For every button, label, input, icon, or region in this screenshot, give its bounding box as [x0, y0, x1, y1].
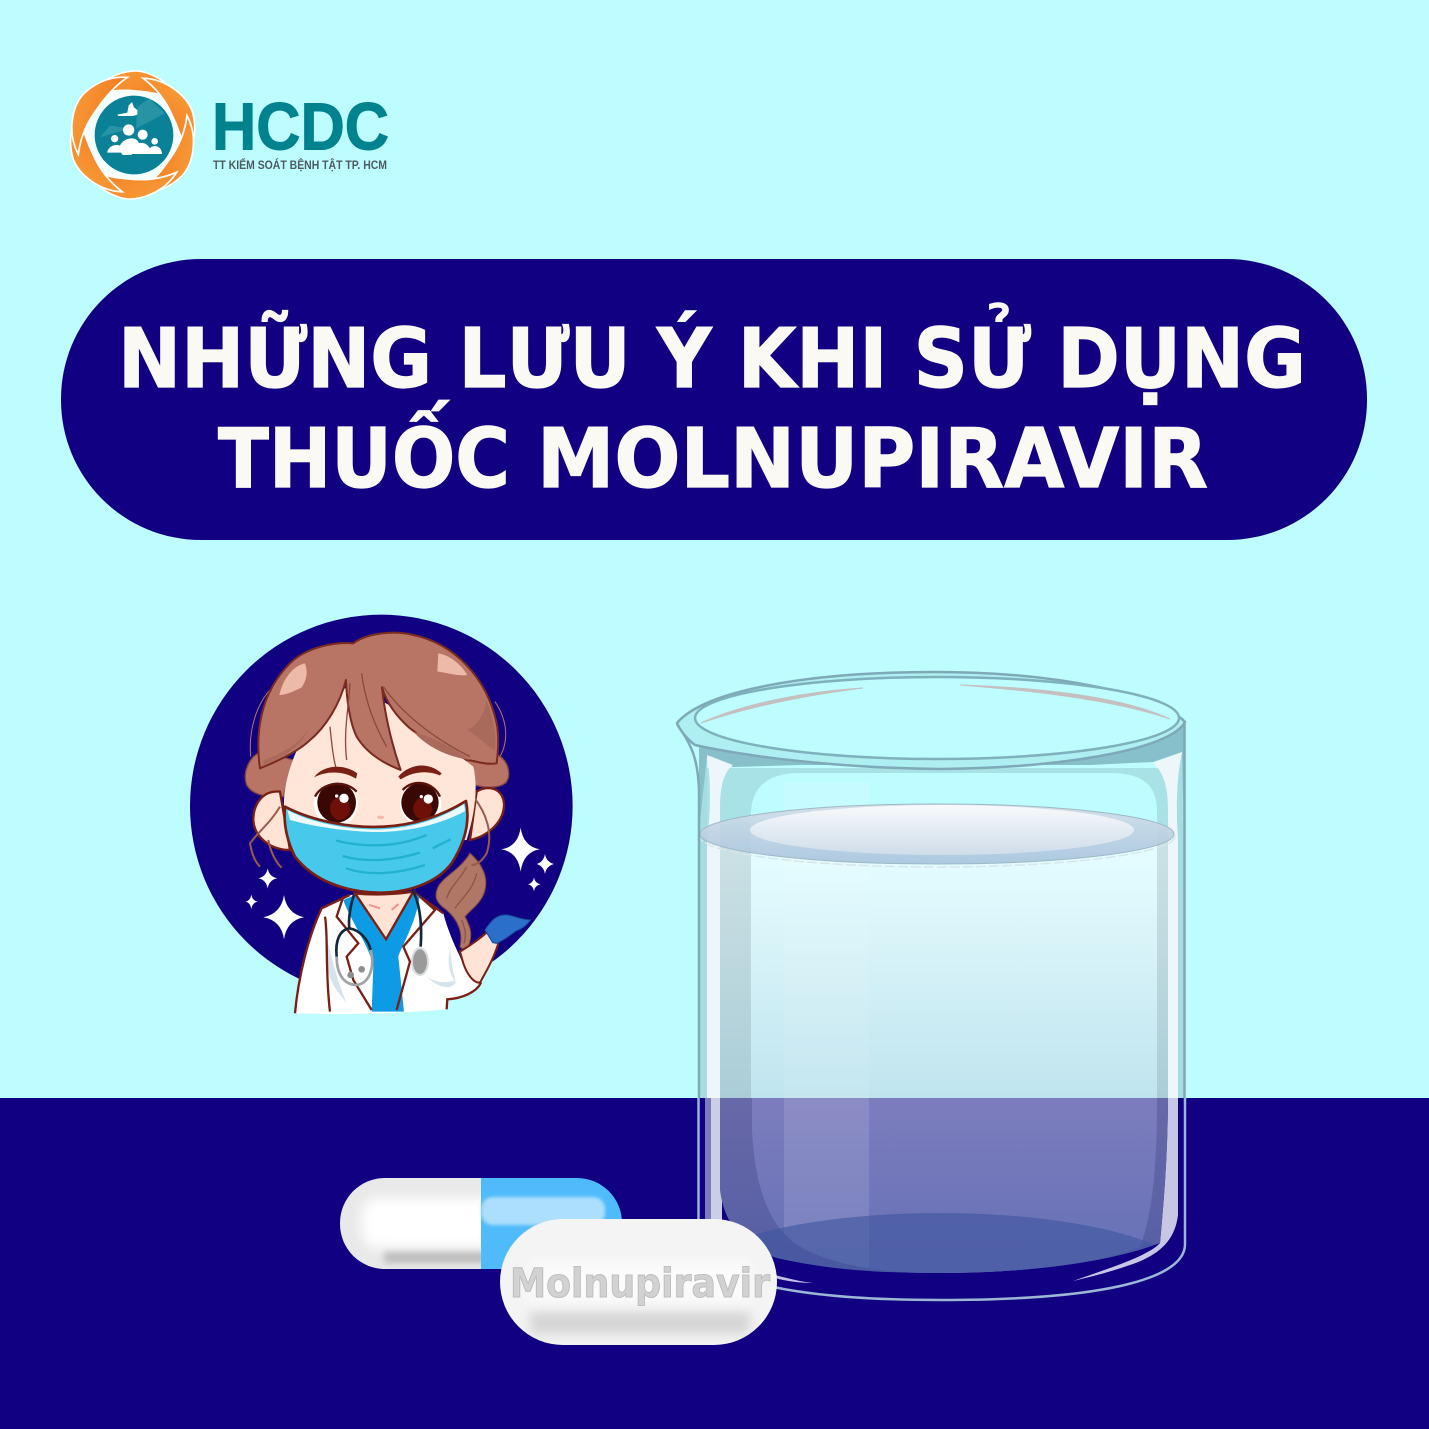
glass side outlines	[677, 722, 1184, 1098]
water above floor	[720, 835, 1168, 1105]
neck marks	[369, 904, 398, 910]
ponytail	[436, 853, 486, 949]
wall highlight right	[1153, 752, 1182, 1098]
blue glove	[485, 915, 531, 943]
capsule shadow band	[384, 1252, 494, 1263]
navy circle	[190, 615, 573, 997]
logo subtitle: TT KIỂM SOÁT BỆNH TẬT TP. HCM	[213, 157, 387, 172]
face	[284, 683, 476, 847]
pill imprint: Molnupiravir	[510, 1261, 770, 1307]
hair shading	[263, 700, 496, 765]
water below floor	[697, 1098, 1186, 1302]
logo emblem: teal disc with people	[95, 96, 173, 174]
tablet pill	[500, 1219, 777, 1345]
title line 2: THUỐC	[218, 400, 510, 507]
white coat	[295, 892, 481, 1014]
glass interior above water	[751, 773, 1157, 870]
capsule blue half	[481, 1178, 622, 1269]
loose hair strands	[250, 797, 489, 868]
doctor illustration	[190, 615, 573, 1014]
rim reflection right	[960, 685, 1170, 719]
water surface	[699, 804, 1175, 867]
wall band	[720, 1098, 1168, 1273]
water glass	[677, 672, 1195, 1351]
left strips	[705, 1098, 711, 1219]
blue scrub	[343, 893, 419, 1012]
title line 2: MOLNUPIRAVIR	[537, 412, 1208, 507]
coat outline	[295, 892, 481, 1013]
lighter column above water	[784, 782, 869, 842]
left eye	[314, 782, 358, 826]
coat lapels	[325, 897, 435, 1012]
forearm	[460, 933, 498, 983]
ears	[253, 788, 504, 850]
capsule white half	[340, 1178, 481, 1269]
coat shading	[325, 937, 457, 1003]
base reflection left	[775, 1275, 813, 1283]
outer base line	[698, 1098, 1185, 1300]
logo: HCDC	[54, 62, 212, 208]
floor band	[0, 1098, 1429, 1429]
rim shadow	[699, 720, 1185, 830]
HCDC text: HCDC	[212, 90, 389, 164]
capsule white highlight	[362, 1198, 502, 1248]
tablet shading	[526, 1309, 754, 1339]
sparkles	[246, 828, 554, 939]
right strip	[1073, 1090, 1178, 1281]
hair buns	[245, 752, 509, 797]
right eye	[400, 783, 441, 825]
bottom water shadow	[756, 1213, 1154, 1273]
eyebrows	[314, 766, 442, 779]
inner water	[752, 1098, 1157, 1273]
logo wordmark	[212, 90, 389, 172]
hair strands	[330, 673, 470, 770]
title banner	[61, 259, 1367, 540]
glass rim	[677, 672, 1185, 769]
outer wall tint	[700, 750, 1184, 1098]
surgical mask	[285, 801, 468, 893]
stethoscope	[336, 891, 428, 985]
neck	[355, 892, 413, 939]
title line 1: NHỮNG LƯU Ý KHI SỬ DỤNG	[118, 303, 1306, 407]
inner shoulder band	[707, 768, 1178, 860]
stray hair lines	[250, 688, 506, 757]
rim reflection left	[701, 688, 863, 723]
capsule blue highlight	[481, 1197, 605, 1225]
wall highlight left	[707, 755, 733, 1098]
logo emblem: orange ring	[54, 62, 212, 208]
hair highlights	[279, 653, 467, 695]
capsule pill	[340, 1178, 622, 1269]
hair	[258, 633, 498, 770]
nose	[377, 816, 384, 819]
